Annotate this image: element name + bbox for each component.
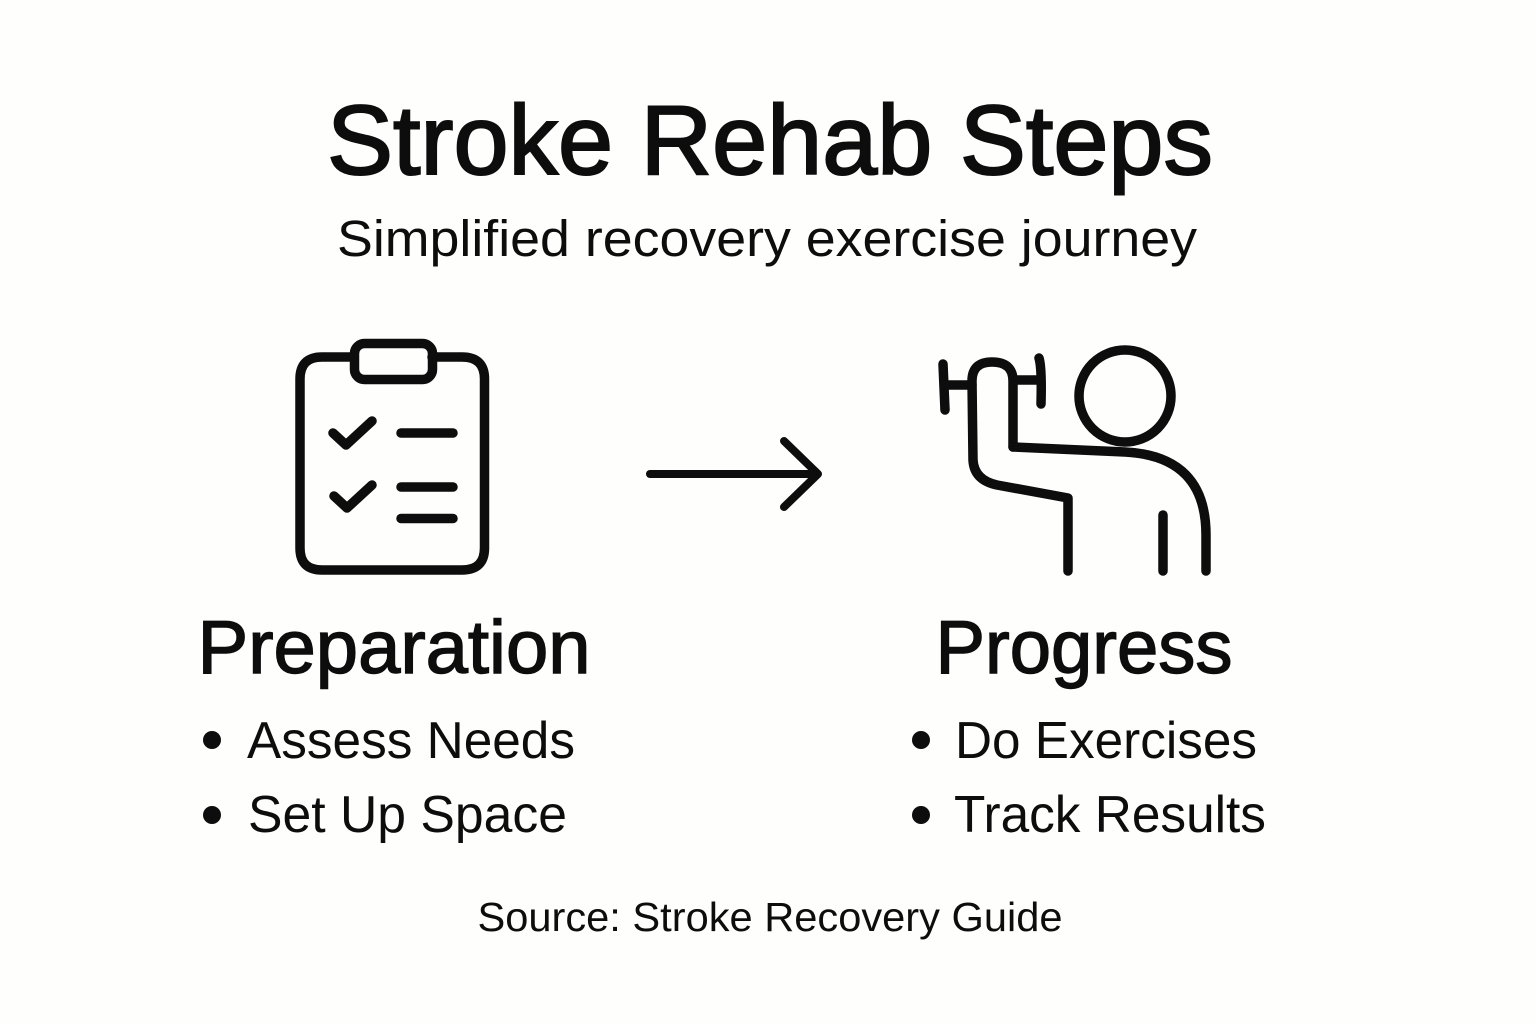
heading: Progress: Progress xyxy=(936,605,1232,689)
list: preparation items: Set Up Space xyxy=(248,786,567,844)
list: progress items xyxy=(912,712,1266,844)
source note: Source: Stroke Recovery Guide xyxy=(478,894,1062,940)
list: progress items: Do Exercises xyxy=(955,712,1257,770)
icon: person lifting dumbbell xyxy=(943,350,1206,571)
list: preparation items: Assess Needs xyxy=(247,712,575,770)
title: Stroke Rehab Steps xyxy=(327,85,1213,195)
subtitle: Simplified recovery exercise journey xyxy=(337,210,1198,267)
arrow xyxy=(650,441,818,507)
heading: Preparation: Preparation xyxy=(198,605,590,689)
icon: clipboard checklist xyxy=(300,344,484,570)
list: progress items: Track Results xyxy=(954,786,1266,844)
list: preparation items xyxy=(203,712,575,844)
